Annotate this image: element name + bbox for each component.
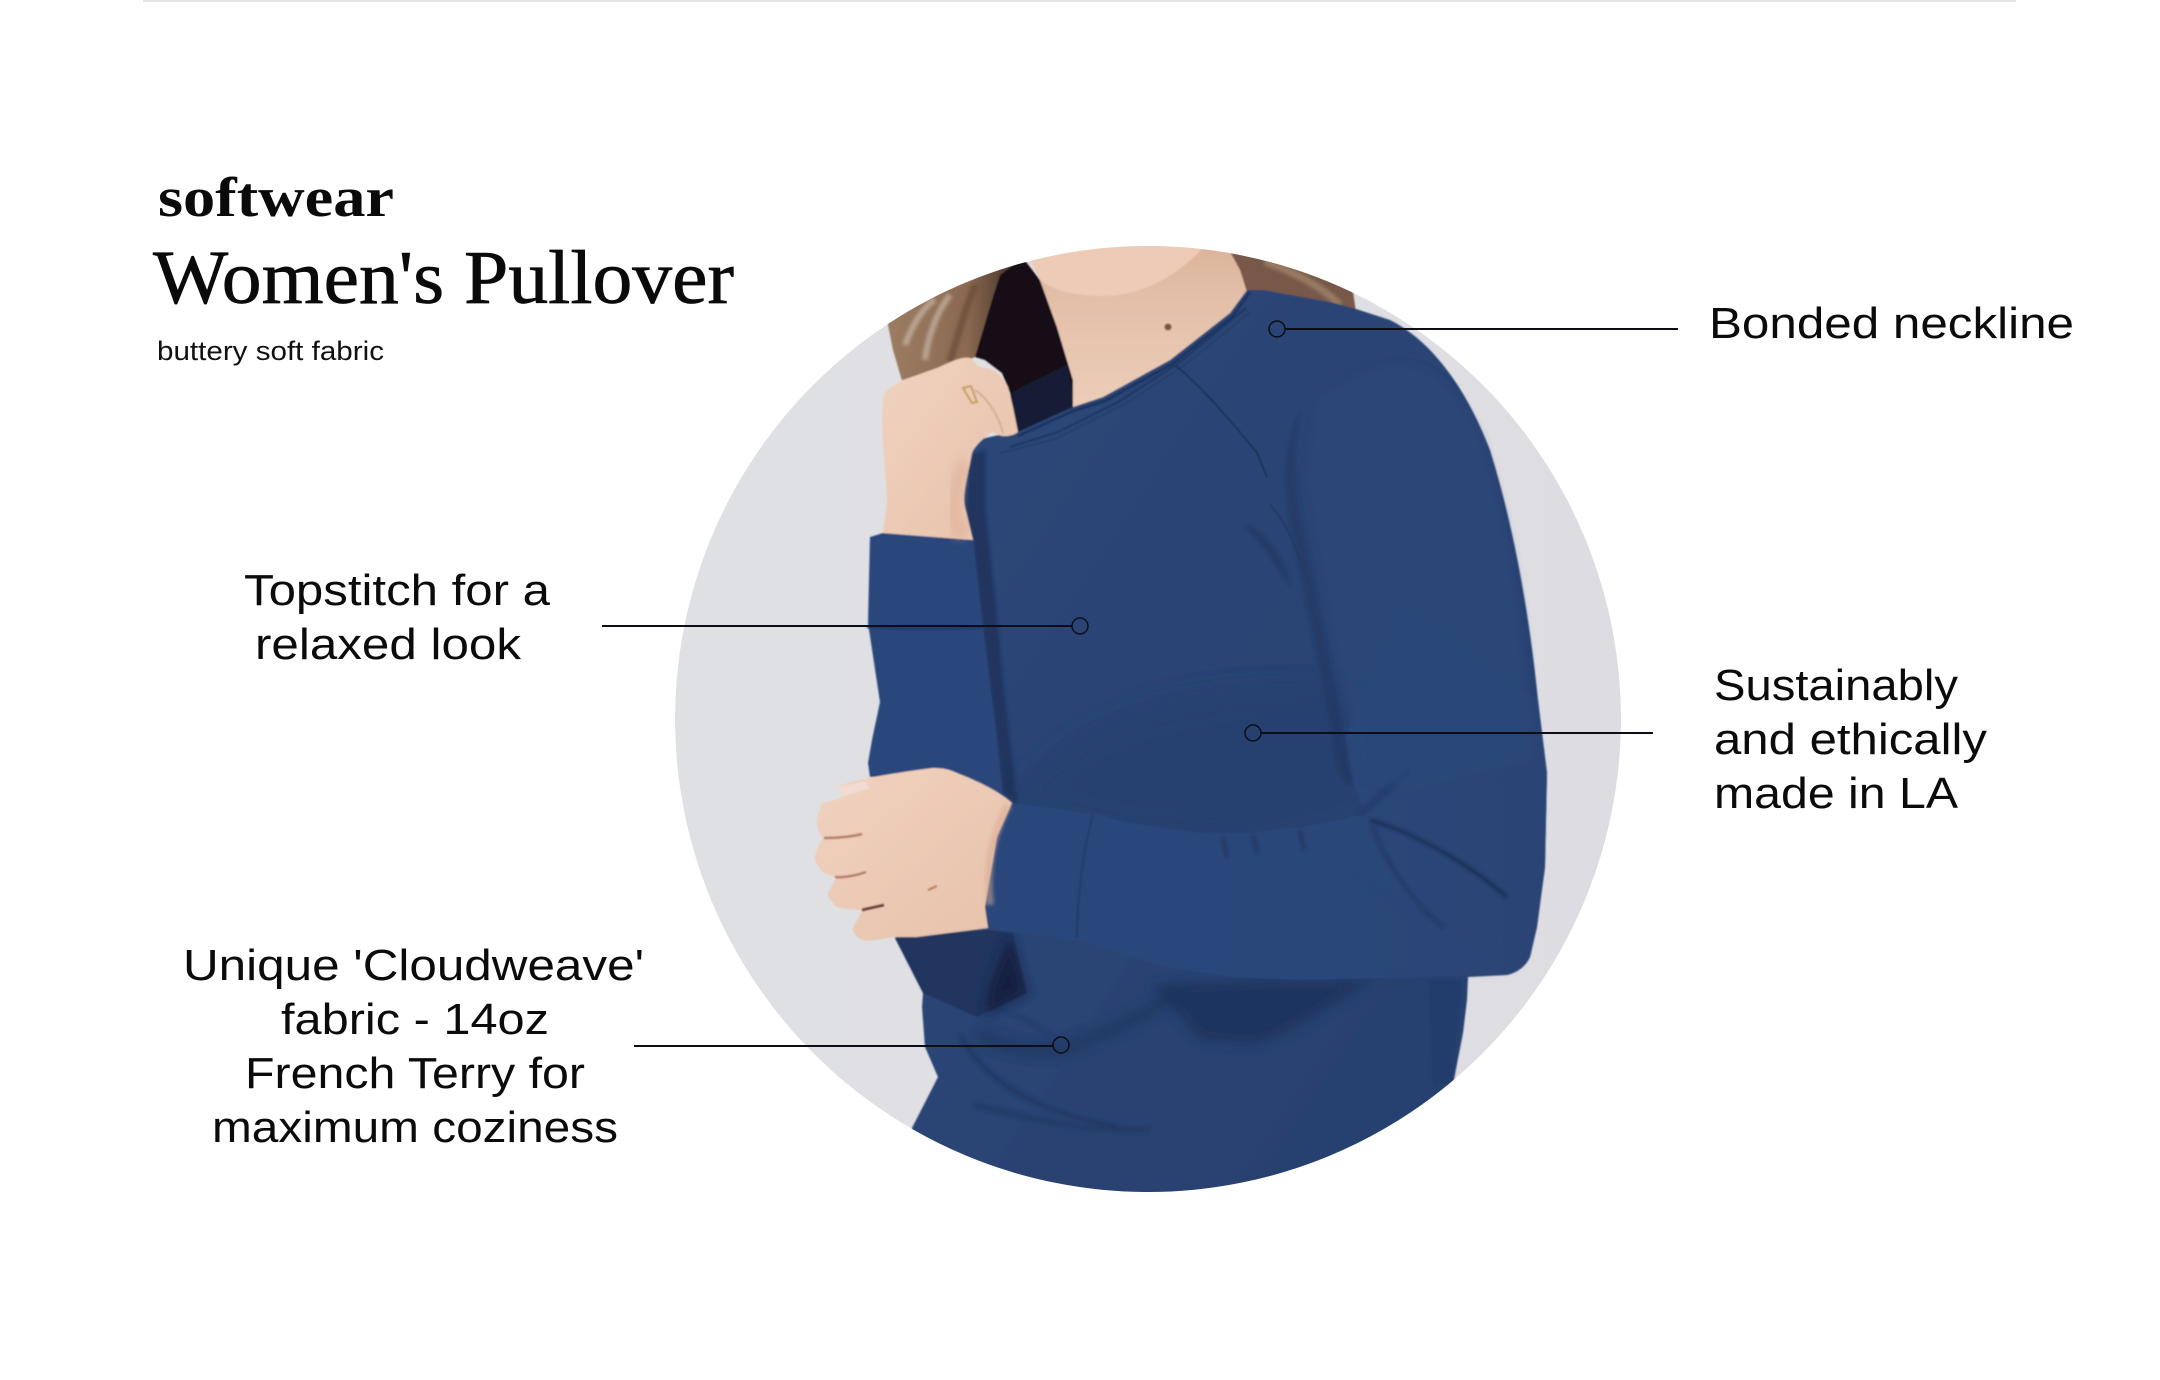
label text: relaxed look [255,620,522,669]
leader line and marker [602,618,1088,634]
product title: Women's Pullover [153,236,734,320]
brand name: softwear: softwear [158,167,394,229]
raised arm sleeve [867,533,1002,793]
hair, right [1230,253,1356,310]
hair, left [887,265,1014,381]
callout: cloudweave fabric [183,941,1069,1152]
top divider rule [143,0,2016,2]
callout: bonded neckline [1269,299,2074,348]
neck and chin [1030,246,1248,408]
leader line and marker [1269,321,1678,337]
label text: French Terry for [245,1049,585,1098]
label text: made in LA [1714,769,1959,818]
leader line and marker [634,1037,1069,1053]
sweater body [894,290,1548,1192]
leader line and marker [1245,725,1653,741]
label text: fabric - 14oz [281,995,549,1044]
label text: Bonded neckline [1709,299,2074,348]
upper arm seam shading [1175,365,1530,790]
upper hand gripping collar [882,358,1018,540]
neckline binding stitches [1000,292,1250,453]
dark shadow behind neck [975,258,1076,434]
label text: maximum coziness [212,1103,618,1152]
photo background circle [675,246,1621,1192]
lower hand resting on arm [815,768,1012,941]
inner collar [1012,365,1076,434]
label text: and ethically [1714,715,1987,764]
label text [244,566,551,669]
dark forearm under hand [895,930,1027,1017]
label text: Unique 'Cloudweave' [183,941,644,990]
brand title block [153,167,734,366]
label text [183,941,644,1152]
callout: sustainably made [1245,661,1987,818]
shadow by forearm [985,935,1027,1015]
callout: topstitch [244,566,1088,669]
label text [1714,661,1987,818]
subtitle: buttery soft fabric [157,336,384,366]
product photo: circular crop of model wearing navy pullover [675,246,1621,1192]
lower arm sleeve and elbow [1004,702,1548,980]
label text: Sustainably [1714,661,1958,710]
label text: Topstitch for a [244,566,551,615]
torso shadow next to raised arm [965,450,1018,805]
body shading [960,691,1463,1130]
